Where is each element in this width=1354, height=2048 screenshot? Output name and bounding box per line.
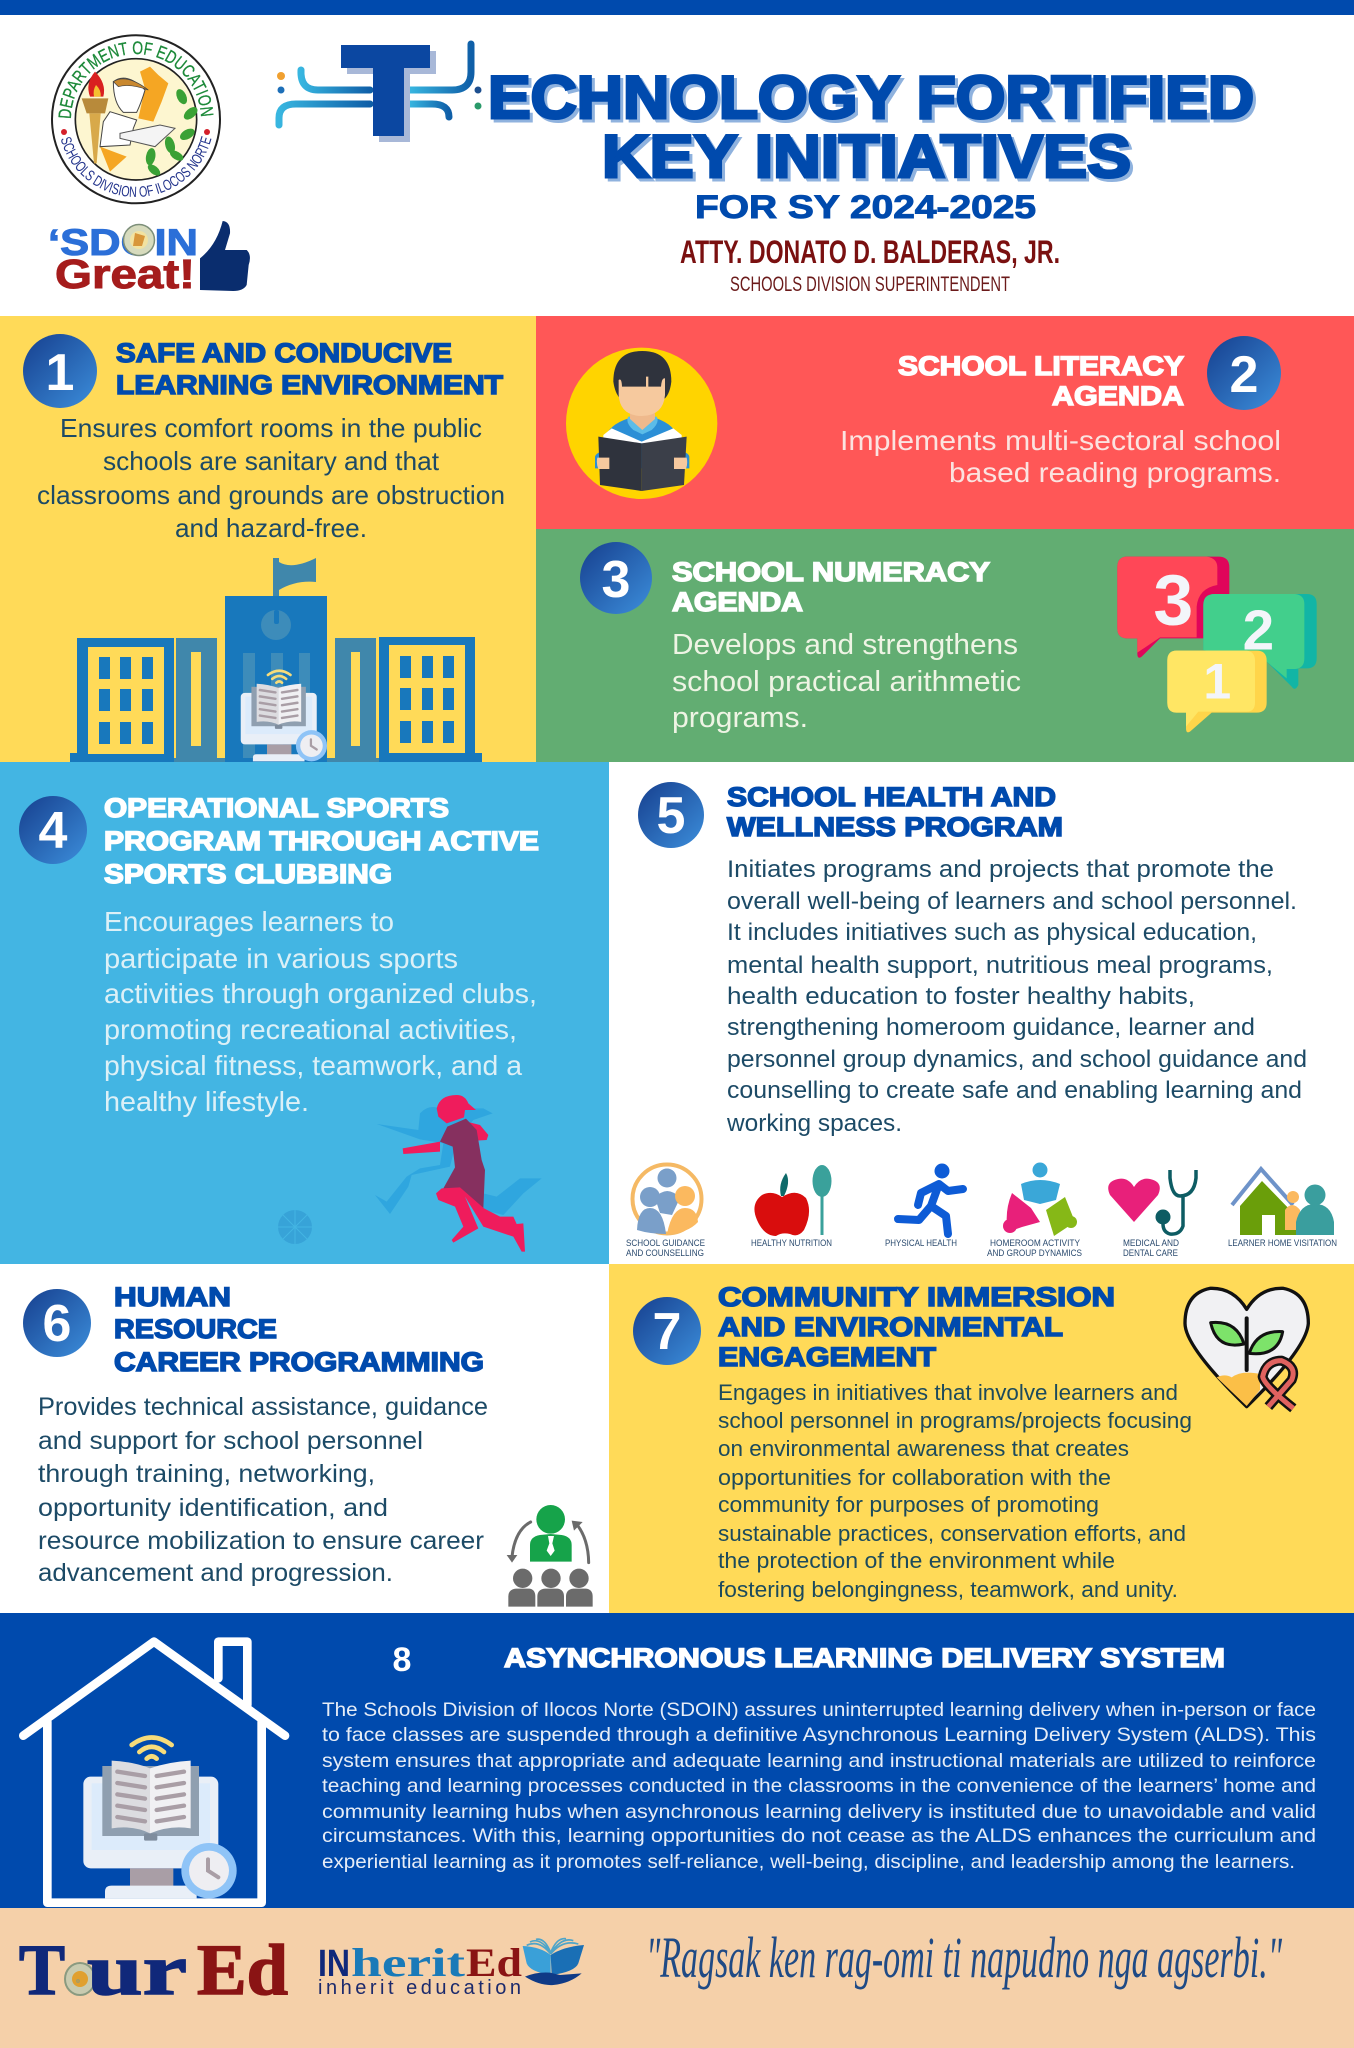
- illustration: school building: [70, 558, 482, 763]
- body text 7: Engages in initiatives that involve learners and: [718, 1380, 1178, 1405]
- body text 5: health education to foster healthy habits,: [727, 983, 1195, 1010]
- logo: TourEd: o: [76, 1976, 80, 1985]
- body text 3: Develops and strengthens: [672, 629, 1018, 661]
- body text 3: [672, 629, 1021, 734]
- body text 1: schools are sanitary and that: [103, 446, 440, 476]
- heading 6: CAREER PROGRAMMING: [114, 1347, 484, 1377]
- body text 6: Provides technical assistance, guidance: [38, 1393, 488, 1421]
- icon: homeroom activity and group dynamics: [987, 1162, 1082, 1258]
- footer band: [0, 1908, 1354, 2048]
- logo: INheritEd: IN: [318, 1943, 350, 1985]
- body text 7: school personnel in programs/projects focusing: [718, 1408, 1192, 1433]
- icon: homeroom activity and group dynamics: HOMEROOM ACTIVITY: [990, 1238, 1080, 1248]
- icon: open book on hand: [523, 1939, 584, 1985]
- icon: school guidance and counselling: AND COUNSELLING: [626, 1248, 704, 1258]
- body text 2: based reading programs.: [949, 457, 1281, 488]
- body text 6: advancement and progression.: [38, 1559, 393, 1587]
- logo: TourEd: [19, 1930, 288, 2010]
- number badge 4: [19, 796, 87, 864]
- number badge 3: 3: [602, 551, 630, 609]
- heading 4: SPORTS CLUBBING: [104, 859, 392, 889]
- body text 2: Implements multi-sectoral school: [840, 425, 1281, 456]
- logo: TourEd: Ed: [197, 1930, 288, 2010]
- number badge 2: 2: [1230, 346, 1258, 404]
- body text 6: opportunity identification, and: [38, 1494, 388, 1522]
- heading 3: [672, 557, 990, 617]
- heading 7: ENGAGEMENT: [718, 1342, 937, 1372]
- body text 8: teaching and learning processes conducted in the classrooms in the convenience of the learners’ home and: [322, 1775, 1316, 1797]
- heading 3: AGENDA: [672, 587, 803, 617]
- logo: INheritEd: inherit education: [318, 1977, 521, 1999]
- body text 1: Ensures comfort rooms in the public: [60, 413, 482, 443]
- heading 5: WELLNESS PROGRAM: [727, 812, 1063, 842]
- title: [488, 64, 1257, 193]
- icon: numbered speech bubbles: [1117, 557, 1317, 732]
- heading 2: AGENDA: [1052, 381, 1184, 411]
- heading 1: LEARNING ENVIRONMENT: [116, 370, 504, 400]
- heading 1: SAFE AND CONDUCIVE: [116, 338, 452, 368]
- body text 7: community for purposes of promoting: [718, 1492, 1099, 1517]
- body text 4: Encourages learners to: [104, 906, 394, 937]
- logo: INheritEd: Ed: [466, 1940, 522, 1985]
- icon: healthy nutrition: HEALTHY NUTRITION: [751, 1238, 832, 1248]
- logo: INheritEd: herit: [351, 1940, 466, 1985]
- icon: globe ball: [278, 1210, 312, 1244]
- heading 7: [718, 1282, 1115, 1372]
- icon: numbered speech bubbles: 3: [1153, 560, 1193, 640]
- number badge 1: [23, 334, 97, 408]
- icon: healthy nutrition: [751, 1165, 832, 1248]
- superintendent name: ATTY. DONATO D. BALDERAS, JR.: [680, 234, 1060, 270]
- body text 5: counselling to create safe and enabling learning and: [727, 1077, 1302, 1104]
- body text 4: physical fitness, teamwork, and a: [104, 1050, 522, 1081]
- panel 8: asynchronous learning delivery system: [0, 1613, 1354, 1908]
- logo: 'SDOIN Great!: Great!: [55, 251, 195, 297]
- body text 5: strengthening homeroom guidance, learner and: [727, 1014, 1255, 1041]
- icon: medical and dental care: [1108, 1170, 1196, 1258]
- illustration: running figures: [375, 1095, 542, 1252]
- panel 1: safe and conducive learning environment: [0, 316, 536, 763]
- icon: T letter with circuit lines: [277, 44, 482, 142]
- number badge 3: [580, 542, 652, 614]
- icon: school guidance and counselling: [626, 1164, 705, 1258]
- icon: medical and dental care: MEDICAL AND: [1123, 1238, 1179, 1248]
- body text 5: overall well-being of learners and school personnel.: [727, 888, 1297, 915]
- heading 6: [114, 1282, 484, 1377]
- body text 3: school practical arithmetic: [672, 666, 1021, 698]
- heading 6: HUMAN: [114, 1282, 231, 1312]
- logo: TourEd: T: [19, 1930, 65, 2010]
- body text 3: programs.: [672, 702, 808, 734]
- body text 7: the protection of the environment while: [718, 1548, 1115, 1573]
- icon: Department of Education seal: DEPARTMENT OF EDUCATION: [58, 41, 214, 118]
- body text 4: participate in various sports: [104, 943, 458, 974]
- heading 8: ASYNCHRONOUS LEARNING DELIVERY SYSTEM: [504, 1643, 1225, 1673]
- logo: TourEd: ur: [87, 1930, 187, 2010]
- title: KEY INITIATIVES: [602, 123, 1131, 190]
- body text 8: experiential learning as it promotes self-reliance, well-being, discipline, and leadership among the learners.: [322, 1851, 1295, 1873]
- body text 7: opportunities for collaboration with the: [718, 1465, 1111, 1490]
- heading 5: [727, 782, 1063, 842]
- body text 4: [104, 906, 537, 1117]
- heading 4: [104, 793, 539, 889]
- logo: INheritEd: [318, 1939, 584, 1999]
- body text 7: [718, 1380, 1192, 1602]
- body text 8: system ensures that appropriate and adequate learning and instructional materials are utilized to reinforce: [322, 1750, 1316, 1772]
- body text 4: promoting recreational activities,: [104, 1014, 517, 1045]
- body text 7: fostering belongingness, teamwork, and unity.: [718, 1577, 1178, 1602]
- header: [48, 34, 1257, 297]
- body text 6: resource mobilization to ensure career: [38, 1527, 484, 1555]
- number badge 4: 4: [39, 802, 68, 860]
- panel 4: operational sports program: [0, 762, 609, 1264]
- heading 2: SCHOOL LITERACY: [898, 351, 1184, 381]
- body text 7: on environmental awareness that creates: [718, 1436, 1129, 1461]
- title: ECHNOLOGY FORTIFIED: [488, 64, 1254, 131]
- panel 3: school numeracy agenda: [536, 529, 1354, 762]
- body text 8: circumstances. With this, learning opportunities do not cease as the ALDS enhances the curriculum and: [322, 1825, 1316, 1847]
- body text 5: mental health support, nutritious meal programs,: [727, 952, 1273, 979]
- body text 4: healthy lifestyle.: [104, 1086, 309, 1117]
- icon: numbered speech bubbles: 2: [1243, 599, 1274, 662]
- body text 1: and hazard-free.: [175, 513, 367, 543]
- body text 8: community learning hubs when asynchronous learning delivery is instituted due to unavoidable and valid: [322, 1801, 1316, 1823]
- body text 5: working spaces.: [726, 1110, 902, 1137]
- heading 4: OPERATIONAL SPORTS: [104, 793, 449, 823]
- body text 8: The Schools Division of Ilocos Norte (SDOIN) assures uninterrupted learning delivery when in-person or face: [322, 1699, 1316, 1721]
- number badge 7: [633, 1297, 701, 1365]
- body text 7: sustainable practices, conservation efforts, and: [718, 1521, 1186, 1546]
- body text 6: [38, 1393, 488, 1587]
- icon: Department of Education seal: [51, 34, 221, 204]
- body text 1: [37, 413, 505, 543]
- icon: learner home visitation: LEARNER HOME VISITATION: [1228, 1238, 1337, 1248]
- icon: learner home visitation: [1228, 1169, 1337, 1248]
- icon: medical and dental care: DENTAL CARE: [1123, 1248, 1178, 1258]
- panel 2: school literacy agenda: [536, 316, 1354, 529]
- body text 5: personnel group dynamics, and school guidance and: [727, 1046, 1307, 1073]
- number badge 5: [638, 782, 704, 848]
- body text 5: Initiates programs and projects that promote the: [727, 856, 1274, 883]
- body text 5: It includes initiatives such as physical education,: [727, 919, 1257, 946]
- number badge 6: 6: [43, 1295, 71, 1353]
- body text 8: [322, 1699, 1316, 1873]
- panel 7: community immersion and environmental engagement: [609, 1264, 1354, 1613]
- icon: child reading a book: [566, 348, 717, 499]
- heading 6: RESOURCE: [114, 1314, 277, 1344]
- illustration: house with online learning icon: [23, 1642, 285, 1903]
- icon: homeroom activity and group dynamics: AND GROUP DYNAMICS: [987, 1248, 1082, 1258]
- heading 4: PROGRAM THROUGH ACTIVE: [104, 826, 539, 856]
- heading 2: [898, 351, 1184, 411]
- heading 5: SCHOOL HEALTH AND: [727, 782, 1056, 812]
- number badge 2: [1207, 336, 1281, 410]
- body text 6: and support for school personnel: [38, 1427, 423, 1455]
- title: ECHNOLOGY FORTIFIED: [491, 67, 1257, 134]
- icon: small seal replacing the letter O: [124, 224, 154, 256]
- icon: thumbs up: [200, 221, 250, 291]
- logo: 'SDOIN Great!: ‘SDOIN: [48, 222, 198, 263]
- icon: Department of Education seal: SCHOOLS DIVISION OF ILOCOS NORTE: [61, 136, 212, 197]
- body text 6: through training, networking,: [38, 1460, 375, 1488]
- icon: heart with plant and ribbon: [1185, 1288, 1308, 1408]
- icon: physical health: PHYSICAL HEALTH: [885, 1238, 957, 1248]
- body text 2: [840, 425, 1281, 488]
- number badge 5: 5: [657, 787, 685, 845]
- icon: physical health: [885, 1164, 963, 1248]
- body text 1: classrooms and grounds are obstruction: [37, 480, 505, 510]
- logo: 'SDOIN Great!: [48, 221, 250, 297]
- panel 6: human resource career programming: [0, 1264, 609, 1613]
- heading 3: SCHOOL NUMERACY: [672, 557, 990, 587]
- number badge 6: [23, 1289, 91, 1357]
- title: KEY INITIATIVES: [605, 126, 1134, 193]
- top banner bar: [0, 0, 1354, 15]
- number badge 7: 7: [653, 1303, 681, 1361]
- body text 8: to face classes are suspended through a definitive Asynchronous Learning Delivery System (ALDS). This: [322, 1724, 1316, 1746]
- number badge 1: 1: [46, 344, 74, 402]
- panel 5: school health and wellness program: [609, 762, 1354, 1264]
- subtitle: school year: FOR SY 2024-2025: [695, 189, 1036, 225]
- icon: numbered speech bubbles: 1: [1203, 653, 1231, 709]
- heading 1: [116, 338, 504, 400]
- superintendent title: SCHOOLS DIVISION SUPERINTENDENT: [730, 273, 1010, 296]
- body text 5: [726, 856, 1307, 1137]
- heading 7: COMMUNITY IMMERSION: [718, 1282, 1115, 1312]
- body text 4: activities through organized clubs,: [104, 978, 537, 1009]
- icon: school guidance and counselling: SCHOOL GUIDANCE: [626, 1238, 705, 1248]
- number 8: 8: [393, 1641, 411, 1679]
- icon: mentor and group: [507, 1505, 593, 1607]
- heading 7: AND ENVIRONMENTAL: [718, 1312, 1063, 1342]
